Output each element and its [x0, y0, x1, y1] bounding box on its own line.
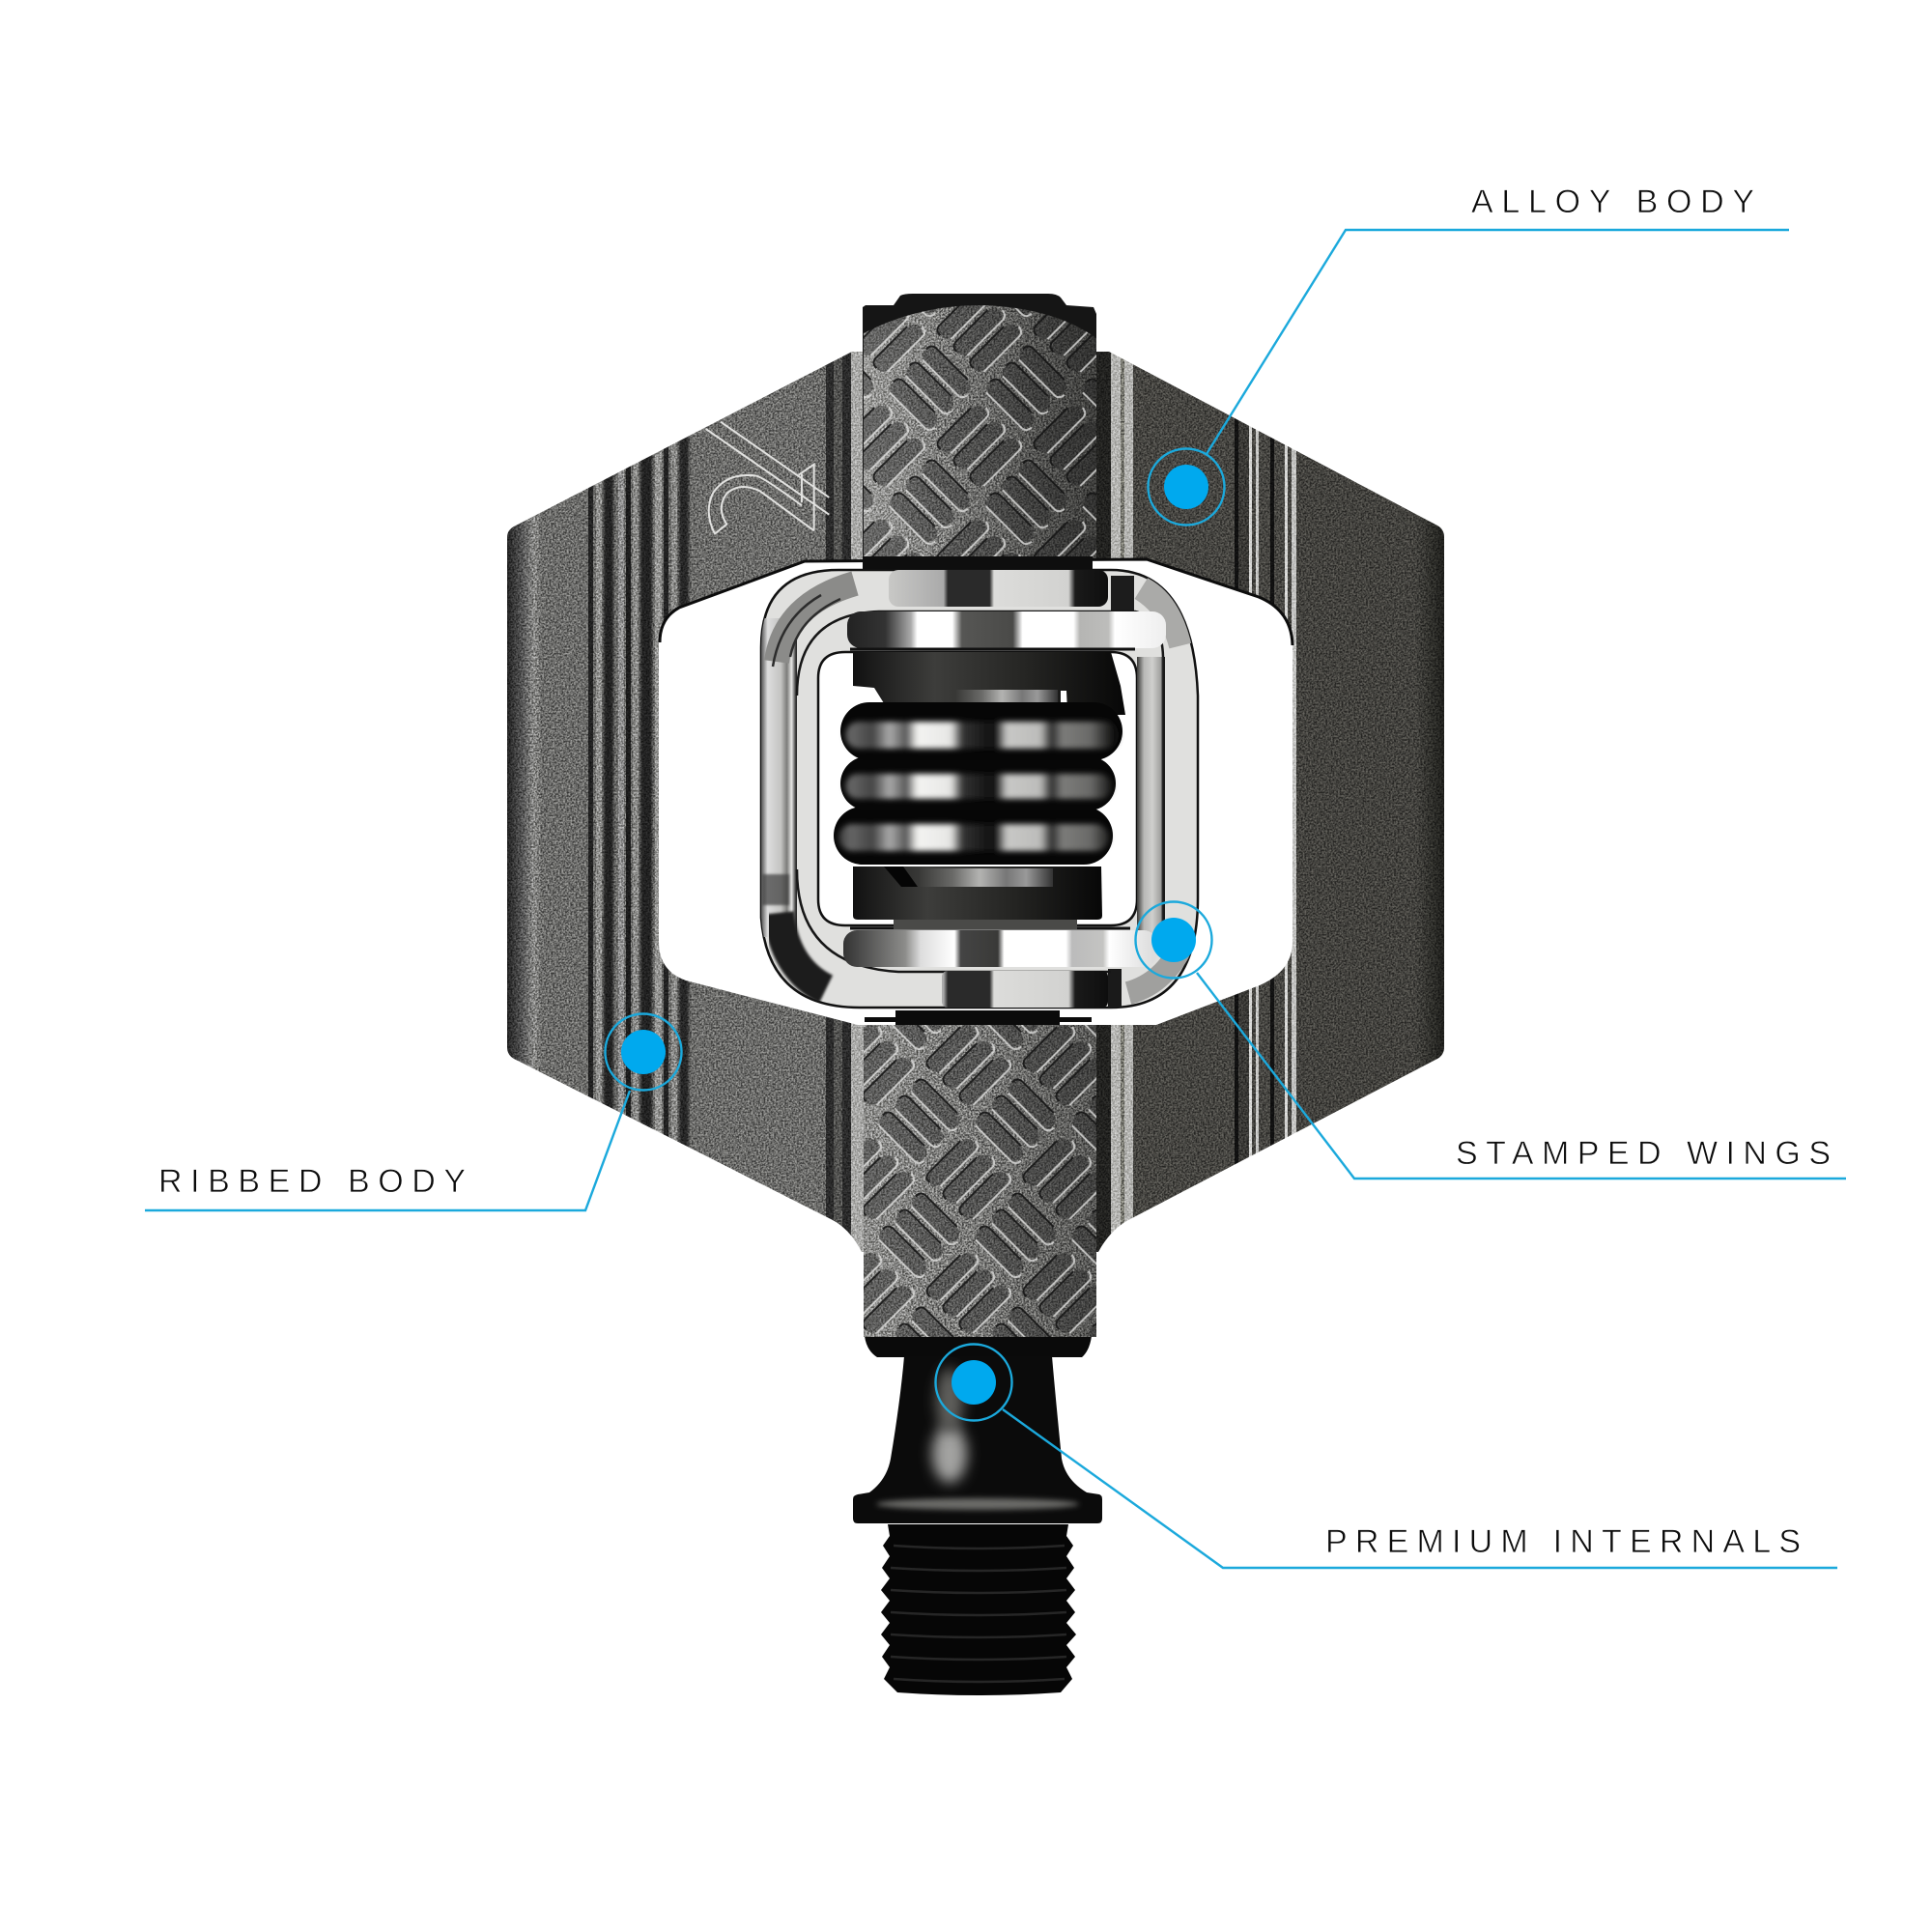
- callout: stamped wings: [1136, 902, 1846, 1179]
- callout: alloy body: [1148, 184, 1789, 526]
- lower tread plate: [864, 1025, 1096, 1357]
- spring coil upper: [840, 702, 1122, 760]
- leader line: premium internals: [1003, 1409, 1837, 1568]
- label: alloy body: ALLOY BODY: [1471, 184, 1754, 220]
- leader line: ribbed body: [145, 1091, 630, 1210]
- leader line: alloy body: [1207, 230, 1789, 454]
- lower retention block: [853, 867, 1102, 929]
- marker dot: ribbed body: [621, 1030, 666, 1074]
- chrome cross tubes: [843, 611, 1166, 967]
- threaded spindle: [881, 1524, 1076, 1695]
- window dark inner edge: [660, 559, 1293, 645]
- marker dot: premium internals: [952, 1360, 996, 1405]
- chrome cage frame: [761, 570, 1198, 1008]
- spring coil lower: [834, 807, 1113, 865]
- marker ring: alloy body: [1148, 448, 1225, 526]
- marker ring: ribbed body: [605, 1014, 682, 1090]
- marker ring: premium internals: [935, 1345, 1012, 1420]
- marker ring: stamped wings: [1136, 902, 1211, 978]
- marker dot: stamped wings: [1151, 918, 1196, 962]
- bottom bearing seats: [865, 1010, 1092, 1025]
- label: ribbed body: RIBBED BODY: [158, 1163, 466, 1200]
- leader line: stamped wings: [1197, 973, 1846, 1179]
- spring coil middle: [840, 756, 1116, 810]
- pedal illustration: [502, 294, 1449, 1695]
- label: premium internals: PREMIUM INTERNALS: [1325, 1523, 1801, 1560]
- upper retention block: [853, 652, 1125, 715]
- top and bottom barrels: [889, 570, 1108, 1008]
- callout: premium internals: [935, 1345, 1837, 1568]
- callout: ribbed body: [145, 1014, 682, 1210]
- marker dot: alloy body: [1164, 465, 1208, 509]
- axle stem and flange: [853, 1356, 1102, 1523]
- upper tread plate: [863, 294, 1096, 556]
- alloy body with ribbed wings: [502, 343, 1449, 1261]
- label: stamped wings: STAMPED WINGS: [1456, 1135, 1831, 1172]
- top bearing seat: [863, 556, 1093, 570]
- logo engraving: [706, 422, 829, 534]
